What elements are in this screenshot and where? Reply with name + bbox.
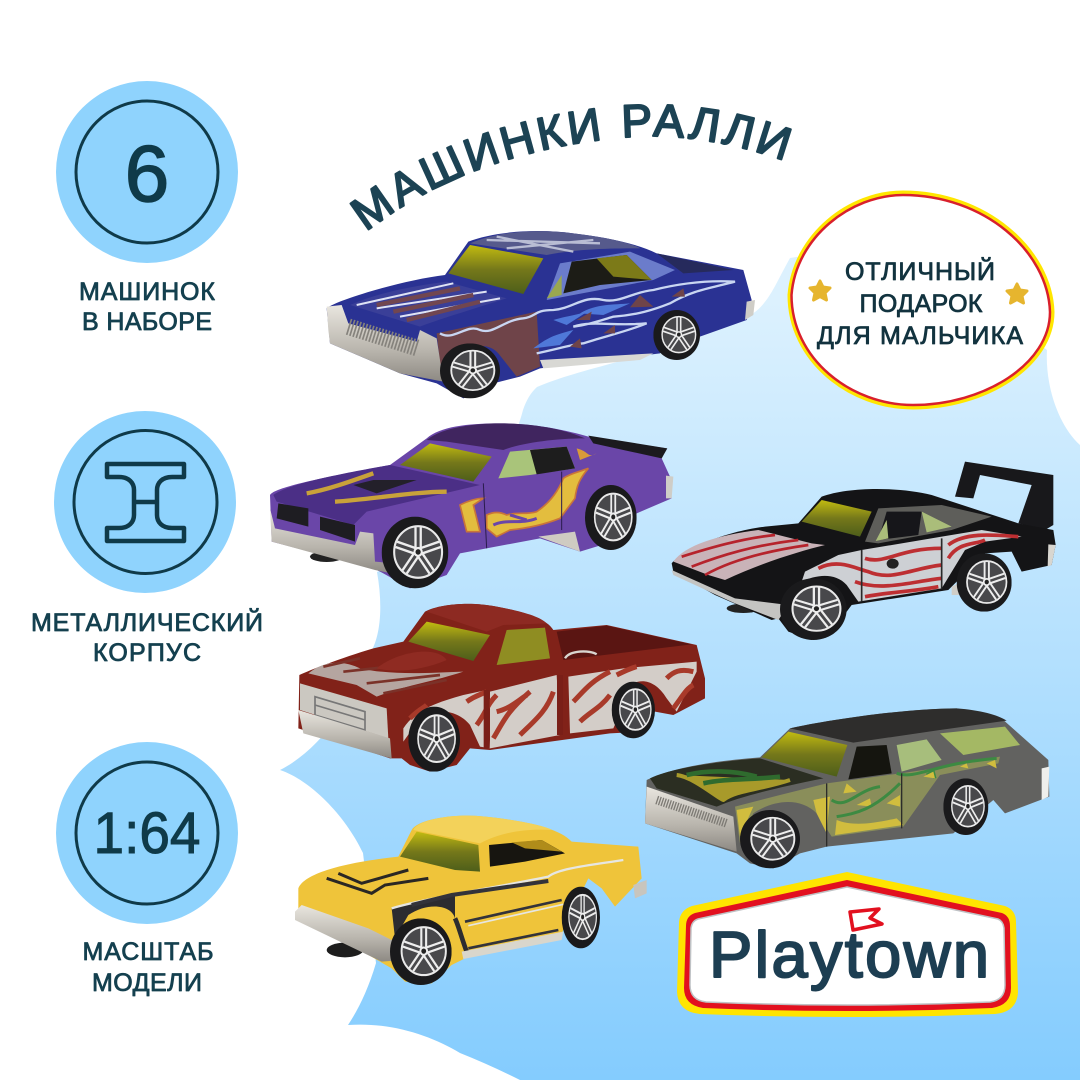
callout: great gift for a boy	[790, 193, 1052, 407]
icon: I-beam	[107, 464, 184, 541]
callout: great gift for a boy: ПОДАРОК	[860, 290, 983, 318]
background blue cloud shape	[280, 240, 1080, 1080]
wordmark: Playtown	[709, 918, 989, 991]
label: metal body: КОРПУС	[93, 639, 201, 667]
car: black with red and white flames and rear wing	[672, 462, 1056, 640]
callout: great gift for a boy: ДЛЯ МАЛЬЧИКА	[817, 322, 1023, 350]
icon: red flag	[850, 909, 882, 930]
badge: 6 cars: 6	[125, 129, 169, 218]
icon: star left	[810, 281, 830, 300]
icon: star right	[1007, 284, 1027, 303]
label: model scale: МАСШТАБ	[82, 938, 214, 966]
label: metal body	[31, 607, 263, 667]
car: red pickup truck	[298, 604, 705, 772]
badge: scale: 1:64	[94, 801, 200, 866]
logo: Playtown	[677, 872, 1018, 1017]
label: cars in the set: МАШИНОК	[79, 278, 215, 306]
label: model scale: МОДЕЛИ	[92, 969, 202, 997]
car: yellow classic	[295, 816, 647, 985]
label: metal body: МЕТАЛЛИЧЕСКИЙ	[31, 607, 263, 637]
car: blue with flames	[327, 231, 755, 398]
car: purple with orange flames	[270, 423, 673, 588]
badge: metal body	[54, 411, 236, 593]
badge: 6 cars	[56, 81, 238, 263]
title: МАШИНКИ РАЛЛИ	[349, 104, 792, 230]
label: cars in the set	[79, 278, 215, 336]
label: model scale	[82, 938, 214, 997]
badge: scale	[56, 742, 238, 924]
callout: great gift for a boy: ОТЛИЧНЫЙ	[845, 256, 995, 286]
label: cars in the set: В НАБОРЕ	[82, 308, 212, 336]
car: grey station wagon with green flames	[645, 708, 1049, 868]
